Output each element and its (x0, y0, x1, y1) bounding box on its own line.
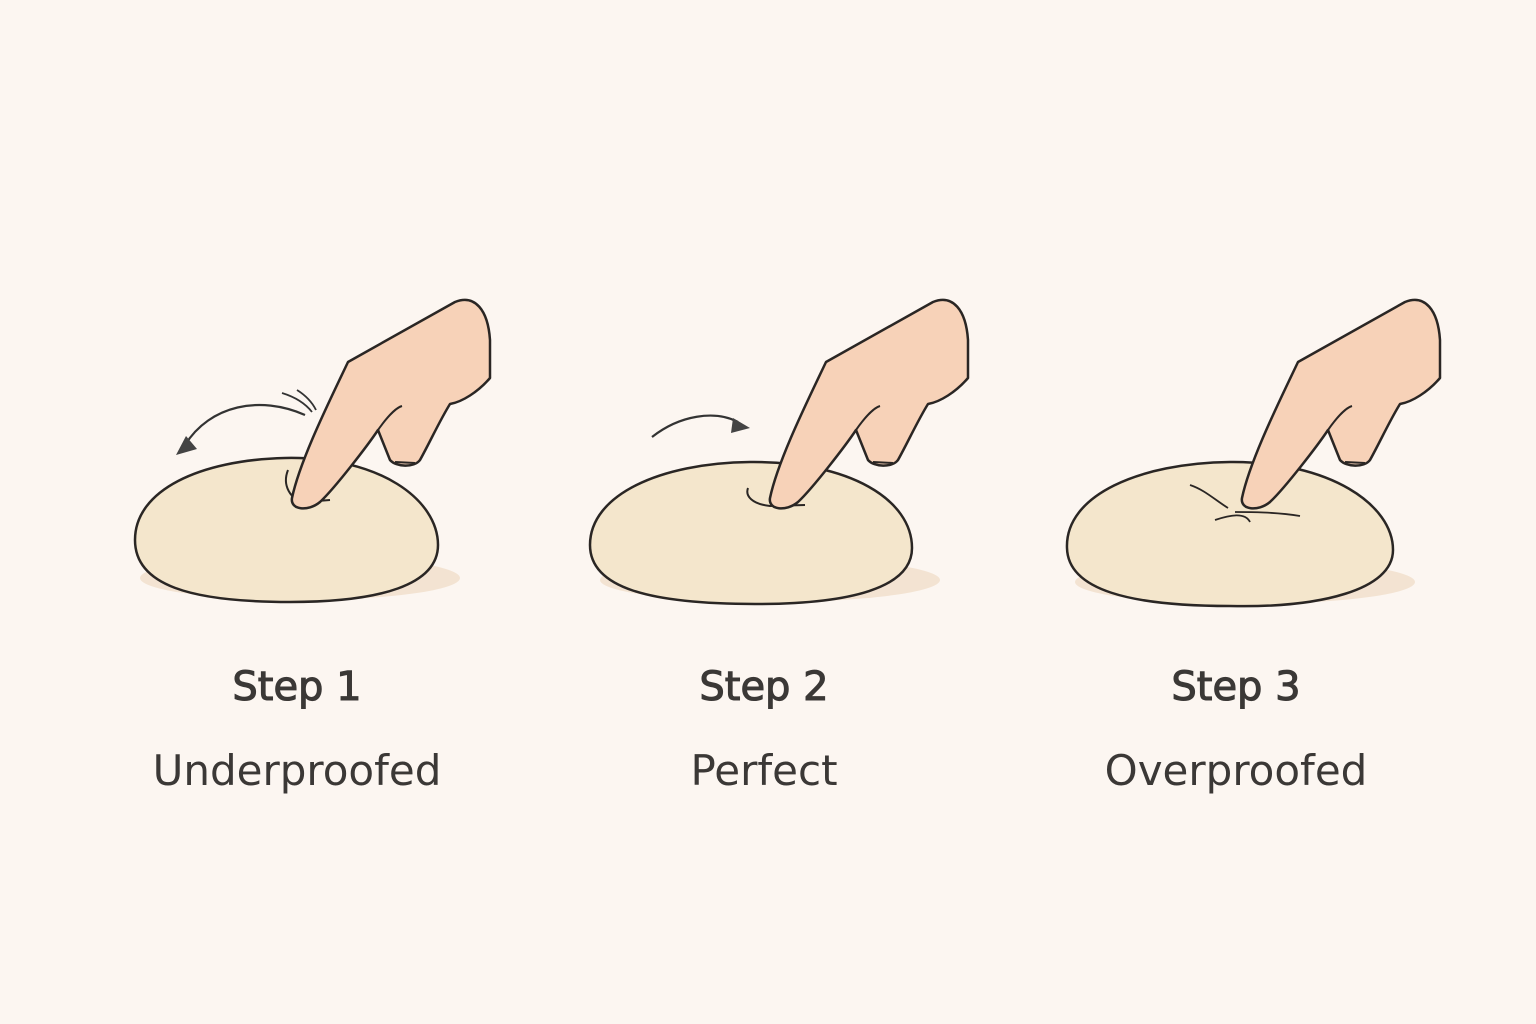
step 2 label: Perfect (690, 746, 838, 795)
panel 3: overproofed (1067, 300, 1440, 606)
step 1 heading: Step 1 (232, 664, 362, 710)
panel 2: perfect (590, 300, 968, 604)
arrow (652, 416, 738, 437)
step 1 label: Underproofed (153, 746, 441, 795)
panel 1: underproofed (135, 300, 490, 602)
arrow (185, 405, 305, 445)
step 2 heading: Step 2 (699, 664, 829, 710)
step 3 heading: Step 3 (1171, 664, 1301, 710)
step 3 label: Overproofed (1105, 746, 1367, 795)
